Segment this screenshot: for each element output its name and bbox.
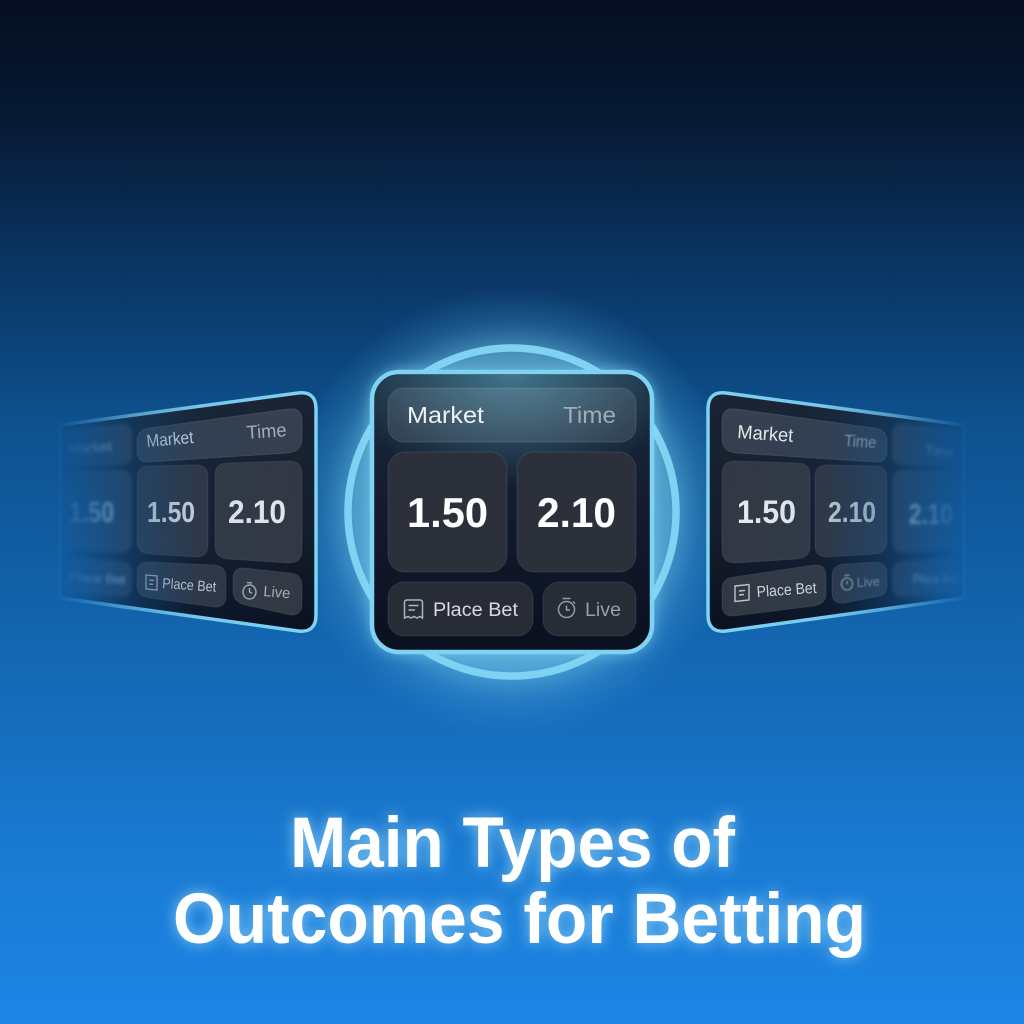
right header labels: Market [737, 422, 795, 447]
icon: receipt [404, 600, 422, 618]
title line 2: Outcomes for Betting [173, 880, 866, 959]
icon: stopwatch [243, 582, 256, 599]
central glow halo [287, 287, 737, 737]
center card top sheen [374, 374, 650, 650]
right odds cell 2.10 [815, 465, 887, 557]
left odds cell 2.10: 2.10 [228, 494, 286, 530]
right header labels: Time [844, 431, 877, 452]
header row [388, 388, 636, 442]
left header labels [147, 424, 286, 447]
title glow: Outcomes for Betting [173, 880, 866, 959]
center card body [372, 372, 652, 652]
button place bet: Place Bet [433, 600, 519, 621]
center card glow [370, 370, 654, 654]
left card faded row: 1.50 [69, 497, 114, 529]
right odds cell 1.50 [722, 461, 810, 563]
right card faded row: 2.10 [909, 499, 953, 531]
left odds cell 2.10 [215, 461, 302, 563]
left header labels: Market [146, 427, 194, 451]
right card faded row: Time [925, 442, 956, 460]
right button place bet: Place Bet [756, 580, 818, 601]
right card faded row: Place Bet [913, 572, 959, 586]
odds cell 1.50 [388, 452, 507, 572]
right card faded row [892, 424, 954, 596]
panel: right betting card in perspective [708, 393, 964, 631]
panel: center betting card [370, 370, 654, 654]
left button place bet: Place Bet [162, 576, 217, 596]
left card header row [137, 409, 302, 462]
title [173, 804, 866, 959]
left card faded row: Market [67, 439, 113, 456]
decorative ring behind center card [348, 348, 676, 676]
panel: left betting card in perspective [60, 393, 316, 631]
right button live: Live [856, 574, 880, 590]
title glow [173, 804, 866, 959]
left card faded row: Place Bet [69, 570, 126, 587]
odds cell 1.50: 1.50 [407, 489, 488, 536]
left button live [233, 568, 302, 615]
button live [543, 582, 636, 636]
odds cell 2.10 [517, 452, 636, 572]
icon: receipt [735, 584, 749, 602]
left card faded row [70, 424, 132, 596]
right header labels [738, 425, 876, 448]
right card header row [722, 409, 887, 462]
left odds cell 1.50: 1.50 [147, 497, 195, 529]
label: market: Market [407, 402, 484, 428]
icon: stopwatch [559, 598, 575, 618]
icon: receipt [146, 575, 157, 590]
button place bet [388, 582, 533, 636]
left button live: Live [263, 583, 291, 602]
icon: stopwatch [842, 575, 853, 590]
right button live [832, 562, 887, 603]
right odds cell 1.50: 1.50 [737, 494, 796, 530]
right card body [708, 393, 964, 631]
right odds cell 2.10: 2.10 [828, 497, 876, 529]
title glow: Main Types of [290, 804, 735, 883]
button live: Live [585, 600, 621, 621]
left odds cell 1.50 [137, 465, 208, 557]
left header labels: Time [246, 420, 287, 444]
label: time: Time [563, 402, 616, 428]
left button place bet [137, 562, 226, 607]
odds cell 2.10: 2.10 [537, 489, 616, 536]
right button place bet [722, 565, 826, 616]
title line 1: Main Types of [290, 804, 735, 883]
left card body [60, 393, 316, 631]
